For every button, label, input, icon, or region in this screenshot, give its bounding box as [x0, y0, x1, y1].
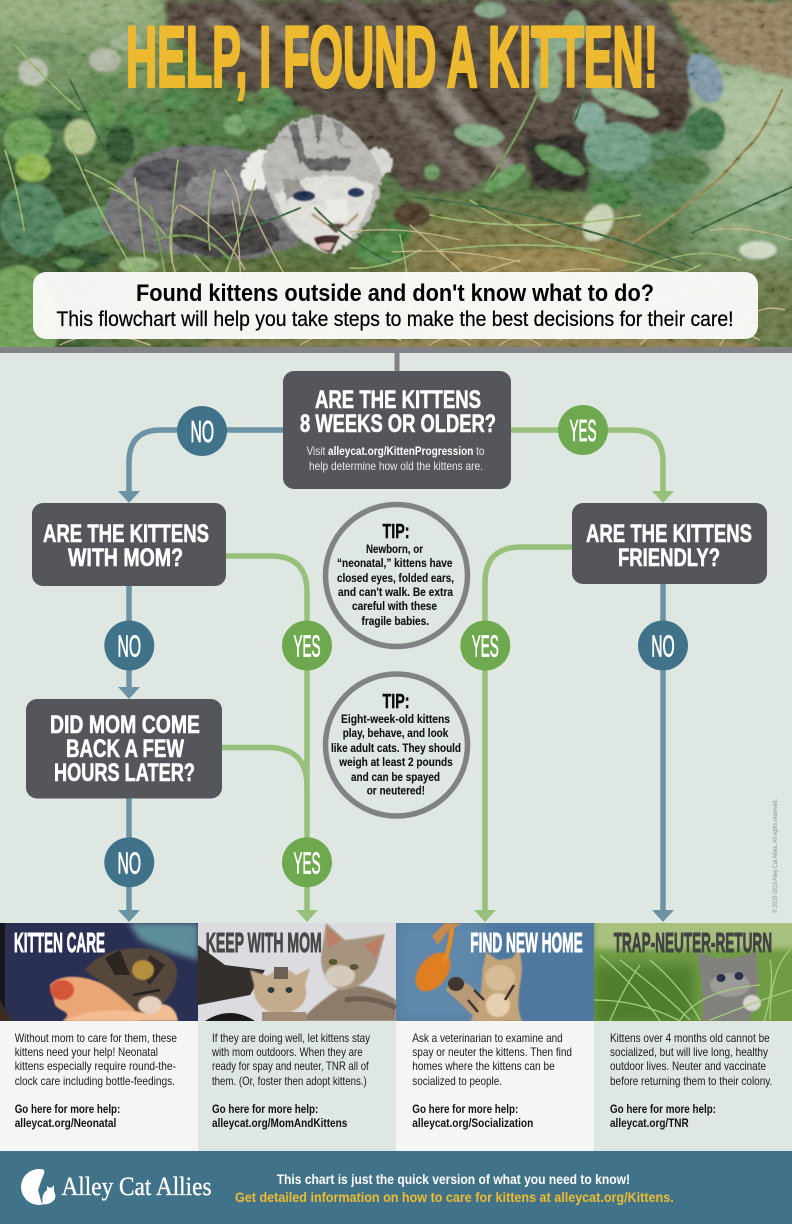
panel description: them. (Or, foster then adopt kittens.) [212, 1074, 367, 1088]
panel description: clock care including bottle-feedings. [15, 1074, 175, 1088]
logo wordmark: Alley Cat Allies [62, 1171, 212, 1201]
question box: 8 weeks or older: help determine how old the kittens are. [309, 459, 483, 473]
panel: trap-neuter-return [594, 923, 792, 1130]
no badge: with mom: NO [118, 628, 141, 664]
yes badge: with mom: YES [294, 628, 320, 664]
flowchart background [0, 348, 792, 923]
panel description: alleycat.org/TNR [610, 1116, 689, 1130]
question box: friendly [572, 503, 767, 584]
panel description [211, 1031, 370, 1130]
question box: mom came back: HOURS LATER? [54, 759, 195, 787]
panel description: alleycat.org/Neonatal [15, 1116, 116, 1130]
arrow: friendly yes to find new home [474, 547, 573, 922]
no badge: friendly [638, 620, 688, 670]
no badge: with mom [104, 620, 154, 670]
question box: 8 weeks or older [283, 371, 511, 489]
panel description: Go here for more help: [212, 1102, 318, 1116]
tip circle: eight-week-old kittens: TIP: [382, 691, 410, 713]
tree trunk and fence [162, 0, 792, 192]
question box: friendly: FRIENDLY? [618, 544, 720, 572]
tip circle: eight-week-old kittens [326, 674, 468, 816]
panel: find new home [396, 923, 594, 1151]
no badge: mom came back: NO [118, 846, 141, 880]
arrow: with mom yes to keep with mom [225, 556, 318, 922]
panel: kitten care: KITTEN CARE [14, 927, 105, 958]
question box: with mom: ARE THE KITTENS [43, 520, 209, 548]
question box: mom came back: BACK A FEW [66, 735, 184, 763]
question box: with mom: WITH MOM? [68, 544, 183, 572]
panel title: KEEP WITH MOM [206, 927, 322, 958]
arrow: start into first question [394, 353, 400, 373]
grey header divider [0, 347, 792, 353]
photo: mother cat and kitten [198, 923, 396, 1024]
photo: hand holding newborn kitten [0, 923, 198, 1021]
arrow: first question no branch [118, 430, 284, 503]
question box: mom came back [26, 699, 222, 798]
arrow: friendly no to TNR [652, 583, 674, 922]
panel description [15, 1031, 177, 1130]
kitten [102, 115, 396, 260]
tip circle: eight-week-old kittens: weigh at least 2 pounds [338, 755, 453, 769]
panel description: alleycat.org/Socialization [412, 1116, 533, 1130]
tip circle: eight-week-old kittens: or neutered! [367, 784, 425, 798]
copyright note: © 2010-2019 Alley Cat Allies. All rights reserved. [772, 799, 779, 913]
panel description: kittens need your help! Neonatal [15, 1045, 158, 1059]
panel description: kittens especially require round-the- [15, 1059, 176, 1073]
tip circle: eight-week-old kittens: and can be spayed [351, 770, 440, 784]
yes badge: mom came back [282, 837, 332, 887]
footer [0, 1151, 792, 1224]
tip circle: eight-week-old kittens: Eight-week-old kittens [341, 712, 450, 726]
foliage leaves [0, 2, 790, 375]
yes badge: with mom [282, 620, 332, 670]
tip circle: neonatal kittens: fragile babies. [362, 614, 429, 628]
tip circle: neonatal kittens: “neonatal,” kittens have [337, 556, 453, 570]
panel description: Go here for more help: [15, 1102, 120, 1116]
tip circle: neonatal kittens: closed eyes, folded ears, [337, 571, 454, 585]
hero photo: kitten in grass by a tree [0, 0, 792, 375]
no badge: mom came back [104, 837, 154, 887]
panel description: Go here for more help: [610, 1102, 716, 1116]
intro heading: Found kittens outside and don't know what to do? [136, 280, 654, 307]
panel description: If they are doing well, let kittens stay [212, 1031, 370, 1045]
yes badge: friendly: YES [472, 628, 499, 664]
panel description: spay or neuter the kittens. Then find [412, 1045, 572, 1059]
panel: kitten care [0, 923, 198, 1151]
no badge: first question [177, 406, 227, 456]
no badge: friendly: NO [651, 628, 675, 664]
panel description: homes where the kittens can be [412, 1059, 555, 1073]
panel description: Ask a veterinarian to examine and [412, 1031, 563, 1045]
tip circle: neonatal kittens: Newborn, or [366, 542, 423, 556]
arrow: with mom no to mom came back [118, 585, 140, 699]
panel description [610, 1031, 772, 1130]
panel description: Without mom to care for them, these [15, 1031, 177, 1045]
grass blades [5, 40, 792, 345]
tip circle: neonatal kittens: TIP: [382, 521, 410, 543]
footer message: This chart is just the quick version of what you need to know! [277, 1171, 630, 1187]
question box: mom came back: DID MOM COME [50, 711, 200, 739]
yes badge: first question: YES [570, 413, 596, 448]
intro subheading: This flowchart will help you take steps to make the best decisions for their care! [56, 307, 734, 331]
question box: 8 weeks or older: ARE THE KITTENS [315, 386, 481, 414]
question box: 8 weeks or older: 8 WEEKS OR OLDER? [300, 410, 496, 438]
arrow: mom came back no to kitten care [118, 797, 140, 922]
tip circle: eight-week-old kittens: like adult cats. They should [331, 741, 461, 755]
tip circle: neonatal kittens [326, 504, 468, 646]
panel description: socialized to people. [412, 1074, 502, 1088]
tip circle: neonatal kittens: and can't walk. Be extra [338, 585, 453, 599]
tip circle: neonatal kittens: careful with these [352, 599, 437, 613]
yes badge: friendly [460, 620, 510, 670]
tip circle: eight-week-old kittens: play, behave, and look [343, 726, 448, 740]
photo: grey kitten in grass [594, 923, 792, 1021]
panel description [412, 1031, 572, 1130]
yes badge: first question [558, 405, 608, 455]
photo: kitten playing with orange toy [396, 923, 594, 1021]
panel description: with mom outdoors. When they are [211, 1045, 363, 1059]
arrow: first question yes branch [511, 430, 674, 503]
icon: Alley Cat Allies logo [21, 1165, 62, 1206]
intro banner [33, 272, 758, 339]
no badge: first question: NO [190, 414, 214, 449]
panel description: Go here for more help: [412, 1102, 518, 1116]
yes badge: mom came back: YES [294, 846, 320, 880]
panel: find new home: FIND NEW HOME [470, 927, 583, 958]
arrow: mom came back yes joins line [222, 748, 307, 786]
question box: with mom [32, 503, 226, 586]
panel description: alleycat.org/MomAndKittens [212, 1116, 348, 1130]
panel: keep with mom [198, 923, 396, 1151]
photo grain [0, 0, 792, 348]
question box: 8 weeks or older: Visit alleycat.org/KittenProgression to [306, 444, 485, 458]
footer call to action: Get detailed information on how to care for kittens at alleycat.org/Kittens. [235, 1189, 674, 1205]
panel description: ready for spay and neuter, TNR all of [212, 1059, 369, 1073]
